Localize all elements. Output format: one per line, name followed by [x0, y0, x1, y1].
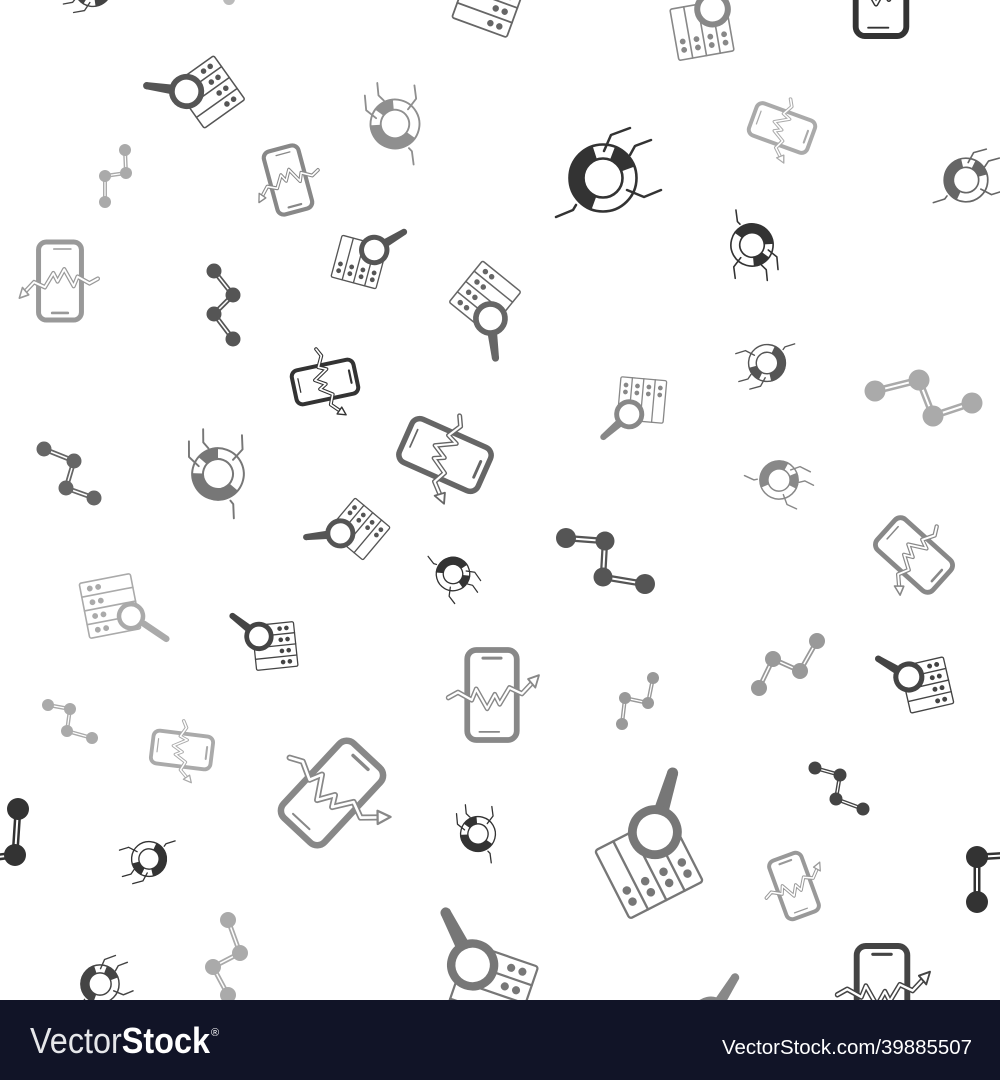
icon: server search bottom [658, 972, 756, 1074]
icon: ring chart [744, 441, 822, 519]
icon: molecule chain [808, 762, 870, 816]
icon: molecule chain [864, 370, 982, 426]
icon: ring chart [351, 74, 433, 165]
icon: molecule chain [616, 672, 659, 730]
footer bar [0, 1000, 1000, 1080]
icon: molecule chain [206, 264, 240, 346]
icon: phone chart large [257, 718, 410, 871]
icon: phone chart [148, 717, 215, 785]
icon: ring chart [117, 836, 175, 887]
icon: molecule cropped top [223, 0, 235, 5]
icon: phone chart [287, 342, 363, 424]
icon: molecule chain [556, 528, 655, 594]
icon: server search [79, 569, 166, 653]
icon: molecule chain [751, 633, 825, 696]
icon: molecule cropped right [966, 846, 1000, 913]
icon: phone chart [387, 399, 501, 514]
icon: molecule chain [205, 912, 248, 1003]
icon: phone chart [19, 242, 98, 320]
icon: ring chart cropped top [57, 0, 122, 20]
icon: server search [600, 375, 667, 445]
icon: molecule chain [42, 699, 98, 744]
icon: server search large bottom [408, 906, 547, 1041]
icon: ring chart large [556, 128, 661, 217]
icon: phone chart top [836, 0, 929, 36]
icon: ring chart [719, 210, 790, 288]
icon: ring chart [169, 419, 261, 518]
icon: server search [142, 41, 245, 143]
icon: server search [331, 214, 408, 293]
logo: VectorStock: VectorStock [30, 1020, 211, 1061]
icon: molecule chain [36, 442, 102, 506]
icon: phone chart [860, 503, 966, 609]
icon: server search [438, 261, 541, 363]
icon: phone chart bottom [837, 946, 930, 1038]
icon: phone chart [755, 846, 835, 925]
icon: server search large [577, 766, 728, 919]
icon: server search top [665, 0, 753, 60]
icon: server search [874, 641, 954, 718]
logo registered mark: ® [211, 1027, 219, 1039]
icon: phone chart [448, 650, 539, 740]
icon: server search [302, 488, 390, 577]
icon: server search [229, 607, 298, 673]
icon: ring chart [73, 956, 133, 1006]
icon: ring chart [733, 339, 795, 393]
icon: ring chart [933, 145, 1000, 209]
image id text: VectorStock.com/39885507 [722, 1036, 972, 1059]
icon: ring chart [428, 545, 485, 607]
icon: phone chart [247, 140, 327, 220]
icon: server search top [424, 0, 535, 37]
icon: molecule chain [99, 144, 132, 208]
icon: molecule cropped left [0, 798, 29, 866]
icon: phone chart [742, 89, 821, 169]
icon: ring chart [447, 798, 505, 863]
